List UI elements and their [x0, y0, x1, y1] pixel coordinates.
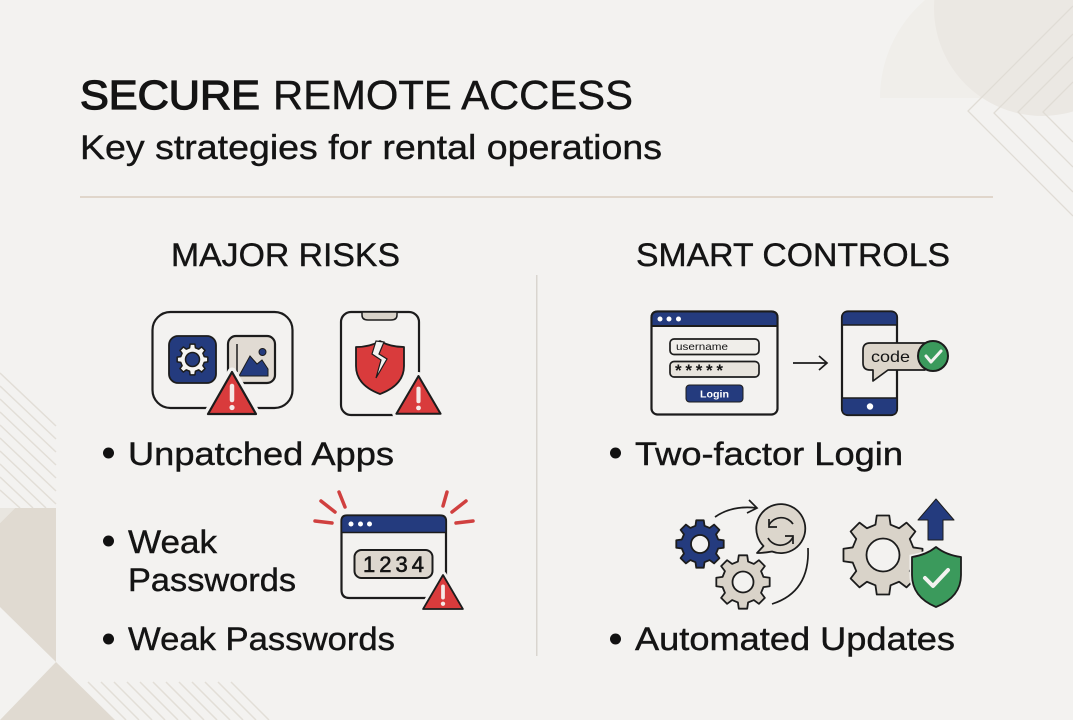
icon: login window — [652, 312, 778, 414]
bullet item: weak passwords: Passwords — [128, 562, 296, 598]
icon: settings app tile — [169, 336, 216, 383]
icon: tan gear — [716, 555, 770, 609]
bullet item: automated updates: Automated Updates — [635, 621, 955, 657]
arrow: gear flow top — [715, 500, 757, 517]
title: SECURE — [80, 72, 260, 118]
bullet item: unpatched apps: Unpatched Apps — [128, 436, 394, 472]
heading: smart controls: SMART CONTROLS — [636, 237, 950, 273]
arrow: login to phone — [793, 356, 827, 370]
icon: upload arrow — [918, 499, 954, 540]
subtitle: Key strategies for rental operations — [80, 129, 662, 167]
icon: warning triangle — [396, 376, 441, 414]
icon: large gear — [843, 515, 923, 595]
icon: automation gears — [676, 500, 808, 609]
icon: unpatched apps — [152, 312, 292, 414]
bullet item: weak passwords repeat: Weak Passwords — [128, 621, 395, 657]
speech bubble: code: code — [871, 349, 910, 366]
icon: update gear with shield — [843, 499, 961, 607]
icon: warning triangle — [423, 575, 463, 609]
bullet item: weak passwords — [103, 524, 296, 598]
decoration: top-right shapes — [880, 0, 1073, 216]
alert rays — [315, 492, 473, 523]
username field: username — [676, 341, 728, 353]
title: REMOTE ACCESS — [273, 72, 633, 118]
icon: refresh bubble — [756, 504, 805, 553]
bullet list: risks — [103, 436, 395, 657]
arrow: gear flow right — [772, 548, 808, 604]
bullet item: two-factor login: Two-factor Login — [635, 436, 903, 472]
decoration: left stripes and tan blocks — [0, 373, 115, 720]
heading: major risks: MAJOR RISKS — [171, 237, 400, 273]
icon: warning triangle — [208, 372, 256, 414]
password field 1234: 1234 — [363, 552, 424, 577]
icon: green check — [918, 341, 948, 371]
password field: ***** — [675, 361, 723, 380]
icon: green shield — [912, 547, 961, 607]
icon: image app tile — [228, 336, 275, 383]
login button: Login — [700, 388, 729, 400]
column divider — [536, 275, 538, 656]
decoration: bottom stripes — [88, 682, 269, 720]
icon: phone with code — [842, 312, 948, 415]
header divider — [80, 196, 993, 198]
bullet list: controls — [610, 436, 955, 657]
icon: phone with broken shield — [341, 312, 441, 415]
password field 1234 — [354, 550, 432, 578]
icon: navy gear — [676, 520, 724, 568]
bullet item: weak passwords: Weak — [128, 524, 218, 560]
icon: broken shield — [356, 341, 404, 394]
title — [80, 72, 633, 118]
icon: weak password window — [315, 492, 473, 609]
